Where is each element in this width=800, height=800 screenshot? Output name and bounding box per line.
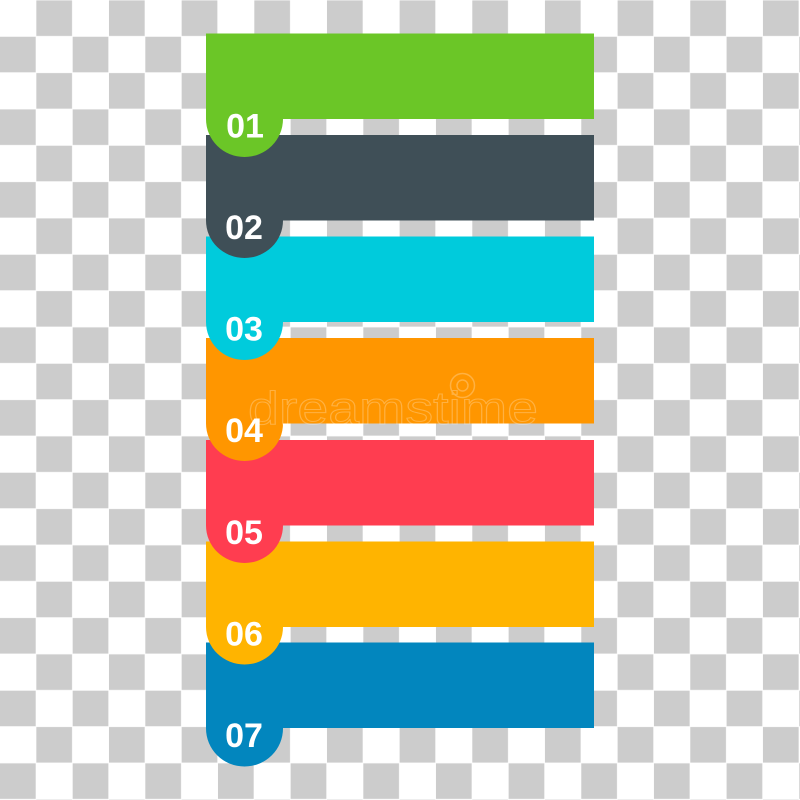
banner 04: [206, 338, 594, 461]
banner 06: [206, 542, 594, 665]
number 04: 04: [225, 412, 263, 450]
number 06: 06: [225, 616, 263, 654]
number 05: 05: [225, 514, 263, 552]
banner 01: [206, 34, 594, 157]
banner 05: [206, 440, 594, 563]
number 02: 02: [225, 209, 263, 247]
number 03: 03: [225, 310, 263, 348]
banner 02: [206, 135, 594, 258]
number 01: 01: [226, 108, 264, 146]
watermark: dreamstime: [248, 382, 538, 434]
banner 03: [206, 236, 594, 360]
number 07: 07: [225, 717, 263, 755]
banner 07: [206, 642, 594, 766]
